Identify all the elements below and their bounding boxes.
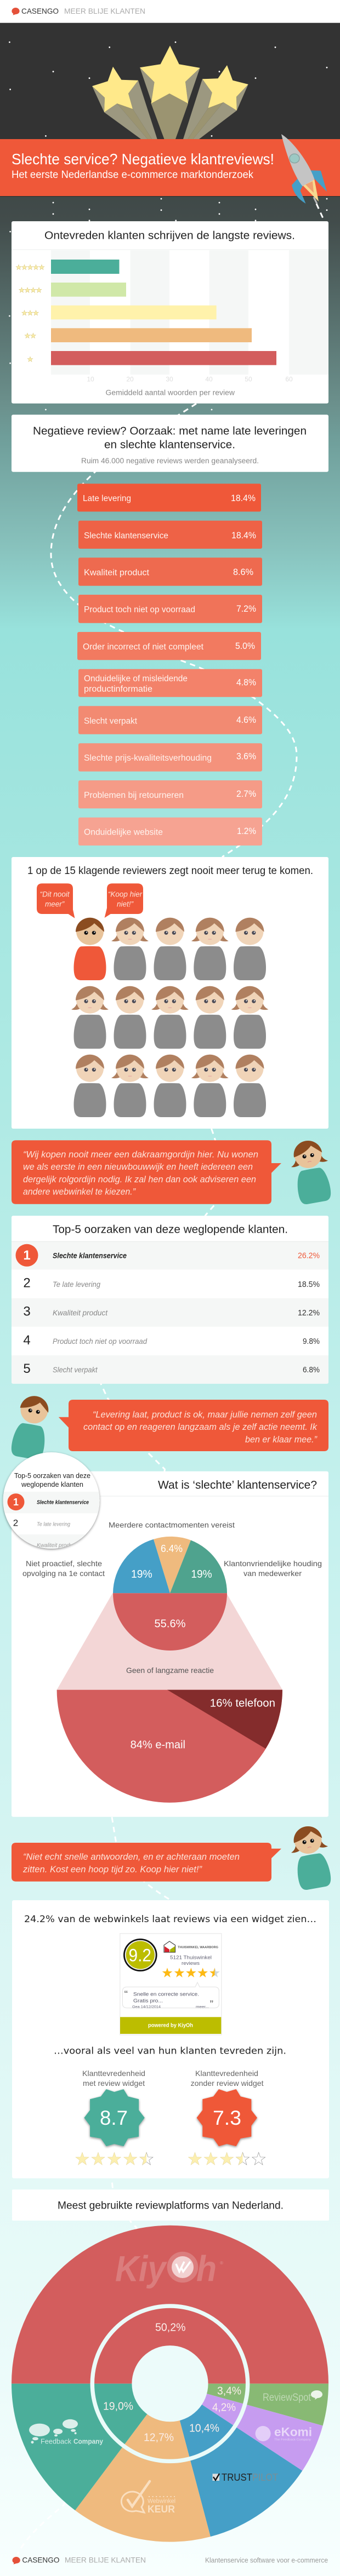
label: niet proactief: opvolging na 1e contact	[22, 1569, 105, 1578]
quote 3: zitten. Kost een hoop tijd zo. Koop hier niet!”	[22, 1864, 202, 1875]
rocket exhaust trail dashes	[316, 204, 325, 222]
badge 8.7	[84, 2089, 145, 2146]
logo: Feedback Company: Company	[73, 2437, 103, 2445]
row 2: 2	[23, 1276, 31, 1291]
logo: ReviewSpot: ReviewSpot	[263, 2392, 311, 2404]
pie chart: 19%	[191, 1568, 212, 1580]
label: klantonvriendelijk: van medewerker	[243, 1569, 302, 1578]
percent labels: 12,7%	[144, 2431, 174, 2443]
panel: what is bad service	[12, 1471, 328, 1817]
quote 1: “Wij kopen nooit meer een dakraamgordijn hier. Nu wonen	[23, 1149, 258, 1159]
speech bubble left: meer”	[45, 900, 65, 909]
caption left	[82, 2069, 145, 2088]
person: quote 3	[287, 1823, 335, 1891]
logo: Trustpilot: PILOT	[252, 2472, 278, 2483]
bar: product toch niet op voorraad	[78, 595, 262, 623]
quote 1	[12, 1140, 281, 1204]
panel: review platforms heading	[12, 2189, 329, 2221]
logo: KiyOh: Kiy	[115, 2249, 167, 2289]
bar: late levering: 18.4%	[231, 493, 256, 503]
decorative star dots	[9, 42, 327, 410]
thuiswinkel text: THUISWINKEL WAARBORG	[178, 1946, 218, 1949]
percent labels: 50,2%	[155, 2322, 186, 2334]
label: klantonvriendelijk	[224, 1559, 322, 1578]
footer tagline: MEER BLIJE KLANTEN	[65, 2555, 146, 2564]
row 2: Te late levering	[53, 1280, 100, 1289]
review snippet: ”	[209, 1999, 214, 2008]
stars 4.5 of 5	[76, 2152, 153, 2165]
quote 2: ben er klaar mee.”	[245, 1434, 318, 1445]
bar: slechte klantenservice: Slechte klantenservice	[84, 531, 168, 540]
badge 7.3: 7.3	[213, 2107, 241, 2129]
row 5: 6.8%	[303, 1366, 320, 1375]
logo: Webwinkel Keur: KEUR	[148, 2504, 175, 2515]
logo: KiyOh: ®	[220, 2261, 223, 2266]
pie chart	[113, 1537, 227, 1651]
logo: KiyOh	[115, 2249, 223, 2289]
sub text: Ruim 46.000 negative reviews werden geanalyseerd.	[81, 457, 259, 465]
percent labels: 3,4%	[217, 2385, 241, 2397]
highlighted person	[73, 918, 106, 980]
label: geen of langzame reactie: Geen of langzame reactie	[126, 1666, 214, 1675]
row 1: 1	[23, 1248, 31, 1263]
caption right: Klanttevredenheid	[195, 2069, 258, 2078]
review count: reviews	[182, 1960, 200, 1967]
row 4: 9.8%	[303, 1337, 320, 1346]
person: quote 2	[10, 1394, 53, 1461]
header wordmark: CASENGO	[21, 7, 59, 15]
label: meerdere contactmomenten: Meerdere contactmomenten vereist	[109, 1520, 235, 1529]
review snippet: Gea 14/12/2014	[132, 2005, 161, 2009]
top header bar	[0, 0, 340, 23]
pie chart: 6.4%	[161, 1543, 183, 1554]
icon: thuiswinkel house	[164, 1941, 175, 1952]
x axis labels: 20	[126, 376, 134, 383]
bar: late levering: Late levering	[83, 494, 131, 503]
heading: Top-5 oorzaken van deze weglopende klanten.	[53, 1224, 288, 1236]
quote 1: dergelijk rolgordijn nodig. Ik zal hen dan ook adviseren een	[23, 1174, 256, 1185]
slice: ReviewSpot	[170, 2384, 328, 2426]
panel: top-5 causes table	[12, 1216, 328, 1384]
bar: onduidelijke website: Onduidelijke website	[84, 828, 163, 837]
row 5: Slecht verpakt	[53, 1365, 98, 1374]
dark hero sky	[0, 23, 340, 139]
score ring: 9.2	[128, 1946, 151, 1965]
caption right	[191, 2069, 264, 2088]
slice: eKomi	[170, 2384, 323, 2471]
bar: kwaliteit product: 8.6%	[233, 567, 253, 577]
heading: 1 op de 15 klagende reviewers zegt nooit meer terug te komen.	[27, 865, 313, 877]
icon: rocket	[281, 134, 327, 204]
bar: onduidelijke productinformatie	[78, 669, 262, 697]
left star	[92, 67, 157, 139]
person: quote 1	[287, 1137, 335, 1206]
row 3: 3	[23, 1304, 31, 1319]
slice: KiyOh	[12, 2226, 328, 2384]
logo: eKomi: eKomi	[274, 2425, 312, 2439]
ring gap and hole	[92, 2306, 248, 2461]
magnifier circle: Kwaliteit product	[37, 1543, 78, 1549]
stars 3.5 of 5	[189, 2152, 265, 2165]
footer	[12, 2555, 328, 2565]
x axis labels: 30	[166, 376, 173, 383]
row 1: 26.2%	[298, 1252, 320, 1261]
bar: slecht verpakt: Slecht verpakt	[84, 717, 138, 726]
panel: 1 in 15 reviewers	[12, 857, 328, 1129]
sub heading: …vooral als veel van hun klanten tevreden zijn.	[54, 2046, 286, 2057]
logo: Trustpilot: TRUST	[222, 2472, 252, 2483]
pie chart: 55.6%	[155, 1618, 186, 1630]
x axis labels: 60	[285, 376, 293, 383]
slice: Feedback Company	[12, 2384, 170, 2510]
panel: review widget	[12, 1900, 329, 2178]
review count: 5121 Thuiswinkel	[170, 1955, 212, 1961]
row 2	[23, 1276, 320, 1291]
icon: casengo logo bubble	[12, 2557, 20, 2565]
heading: Negatieve review? Oorzaak: met name late leveringen	[33, 425, 307, 437]
review snippet: Gratis pro...	[133, 1998, 163, 2004]
example widget	[120, 1934, 222, 2035]
title banner	[0, 139, 340, 197]
chart stripes and bars	[51, 250, 328, 375]
bar: onduidelijke productinformatie: productinformatie	[84, 685, 152, 694]
badge 8.7: 8.7	[100, 2107, 128, 2129]
connecting dashed path: lower sections	[18, 1129, 220, 2554]
magnifier circle	[0, 1452, 104, 1551]
quote 1: we als eerste in een nieuwbouwwijk en heeft iedereen een	[23, 1162, 253, 1172]
row 1	[12, 1242, 328, 1269]
magnifier circle: Top-5 oorzaken van deze	[14, 1471, 90, 1480]
score ring	[123, 1939, 157, 1971]
bar: order incorrect: 5.0%	[235, 641, 255, 651]
logo: Webwinkel Keur	[121, 2481, 175, 2515]
bar: slecht verpakt: 4.6%	[236, 715, 256, 725]
bar: kwaliteit product: Kwaliteit product	[84, 568, 150, 578]
x axis labels: 40	[205, 376, 213, 383]
bar: retourneren: Problemen bij retourneren	[84, 791, 184, 800]
row 5	[12, 1355, 328, 1384]
logo: Feedback Company: Feedback	[41, 2437, 72, 2445]
speech bubble right: niet!”	[117, 900, 134, 909]
row 4: 4	[23, 1333, 31, 1348]
speech bubble right	[105, 883, 143, 918]
header tagline: MEER BLIJE KLANTEN	[64, 7, 145, 15]
people grid	[71, 918, 269, 1117]
bar: onduidelijke productinformatie: 4.8%	[236, 677, 256, 688]
bar: slecht verpakt	[78, 706, 262, 734]
gold stars	[162, 1968, 220, 1977]
bar: kwaliteit product	[78, 557, 262, 586]
logo: eKomi	[256, 2425, 312, 2441]
bar: onduidelijke website: 1.2%	[237, 826, 256, 836]
logo: Feedback Company	[29, 2419, 103, 2445]
speech bubble left	[37, 883, 75, 918]
half pie chart: 84% e-mail	[131, 1739, 185, 1751]
row 4	[23, 1333, 320, 1348]
magnifier circle: Te late levering	[37, 1522, 70, 1528]
slice: Webwinkelkeur	[75, 2384, 211, 2542]
magnifier circle: 1	[13, 1497, 19, 1508]
logo: eKomi: The Feedback Company	[274, 2438, 311, 2441]
axis title: Gemiddeld aantal woorden per review	[105, 389, 235, 397]
footer note: Klantenservice software voor e-commerce	[205, 2557, 328, 2565]
row 3: 12.2%	[298, 1309, 320, 1318]
x axis labels: 50	[245, 376, 252, 383]
magnifier circle: weglopende klanten	[21, 1480, 83, 1488]
right star	[183, 65, 248, 139]
row 2: 18.5%	[298, 1280, 320, 1289]
review count	[170, 1955, 212, 1967]
quote 3: “Niet echt snelle antwoorden, en er achteraan moeten	[23, 1852, 240, 1862]
bar: retourneren: 2.7%	[236, 789, 256, 799]
footer wordmark: CASENGO	[22, 2555, 60, 2564]
powered by bar: powered by KiyOh	[148, 2023, 193, 2029]
centre star	[140, 45, 200, 139]
review snippet: “	[124, 1989, 128, 1998]
x axis labels: 10	[87, 376, 94, 383]
label: klantonvriendelijk: Klantonvriendelijke houding	[224, 1559, 322, 1568]
bar: late levering	[77, 484, 261, 511]
percent labels: 4,2%	[212, 2401, 236, 2413]
caption left: Klanttevredenheid	[82, 2069, 145, 2078]
bar: onduidelijke productinformatie: Onduidelijke of misleidende	[84, 674, 188, 683]
icon: casengo logo bubble	[12, 8, 20, 15]
heading: Ontevreden klanten schrijven de langste reviews.	[44, 230, 295, 242]
panel: review length bar chart	[12, 221, 328, 404]
zoom funnel	[57, 1593, 282, 1690]
magnifier circle: 2	[13, 1518, 18, 1528]
logo: Webwinkel Keur: Webwinkel	[148, 2498, 175, 2505]
quote 1: andere webwinkel te kiezen.”	[23, 1187, 136, 1197]
quote 2: contact op en reageren langzaam als je zelf actie neemt. Ik	[83, 1422, 318, 1432]
quote 2	[59, 1400, 328, 1451]
subtitle: Het eerste Nederlandse e-commerce marktonderzoek	[12, 169, 253, 181]
percent labels: 19,0%	[103, 2401, 133, 2413]
bar: slechte klantenservice: 18.4%	[231, 530, 256, 540]
half pie chart: 16% telefoon	[210, 1698, 275, 1710]
quote 3	[12, 1843, 281, 1882]
quote 2: “Levering laat, product is ok, maar jullie nemen zelf geen	[93, 1409, 317, 1419]
bar: prijs-kwaliteit: Slechte prijs-kwaliteitsverhouding	[84, 754, 212, 763]
powered by bar	[120, 2017, 221, 2034]
speech bubble left: “Dit nooit	[40, 890, 70, 899]
caption right: zonder review widget	[191, 2079, 264, 2088]
heading: 24.2% van de webwinkels laat reviews via een widget zien…	[24, 1914, 316, 1925]
three extruded stars	[92, 45, 248, 139]
bar: prijs-kwaliteit: 3.6%	[236, 751, 256, 762]
bar: prijs-kwaliteit	[78, 743, 262, 772]
label: niet proactief	[22, 1559, 105, 1578]
bar: order incorrect: Order incorrect of niet compleet	[83, 642, 204, 652]
speech bubble right: “Koop hier	[108, 890, 143, 899]
x axis labels	[87, 376, 293, 383]
review snippet	[122, 1982, 219, 2009]
row 3: Kwaliteit product	[53, 1308, 108, 1317]
row 5: 5	[23, 1361, 31, 1376]
review snippet: Snelle en correcte service.	[133, 1991, 199, 1997]
slice: Trustpilot	[170, 2384, 302, 2537]
bar: retourneren	[78, 780, 262, 808]
panel: review platforms heading: Meest gebruikte reviewplatforms van Nederland.	[58, 2200, 284, 2211]
star rating rows	[16, 264, 44, 361]
heading line 2: en slechte klantenservice.	[104, 439, 235, 451]
pie chart: 19%	[131, 1568, 152, 1580]
magnifier circle: Slechte klantenservice	[37, 1500, 89, 1506]
bar: product toch niet op voorraad: Product toch niet op voorraad	[84, 605, 195, 614]
percent labels: 10,4%	[189, 2423, 219, 2435]
label: niet proactief: Niet proactief, slechte	[26, 1559, 102, 1568]
donut chart: review platforms	[12, 2226, 328, 2542]
panel: negative review causes heading	[12, 415, 328, 472]
row 3	[12, 1298, 328, 1327]
review snippet: meer...	[196, 2005, 209, 2009]
connecting dashed path: cards to cause list	[51, 404, 297, 857]
percent labels	[103, 2322, 241, 2443]
bar: order incorrect	[77, 632, 261, 660]
bar: product toch niet op voorraad: 7.2%	[236, 603, 256, 614]
logo: Trustpilot	[213, 2472, 278, 2483]
badge 7.3	[197, 2089, 257, 2146]
row 4: Product toch niet op voorraad	[53, 1337, 148, 1346]
bar: onduidelijke website	[78, 818, 262, 846]
half pie chart	[57, 1690, 282, 1803]
main title: Slechte service? Negatieve klantreviews!	[12, 151, 274, 168]
logo: KiyOh: h	[196, 2249, 217, 2289]
row 1: Slechte klantenservice	[53, 1251, 127, 1260]
caption left: met review widget	[83, 2079, 145, 2088]
heading: Wat is ‘slechte’ klantenservice?	[158, 1479, 317, 1491]
bar: slechte klantenservice	[78, 521, 262, 549]
